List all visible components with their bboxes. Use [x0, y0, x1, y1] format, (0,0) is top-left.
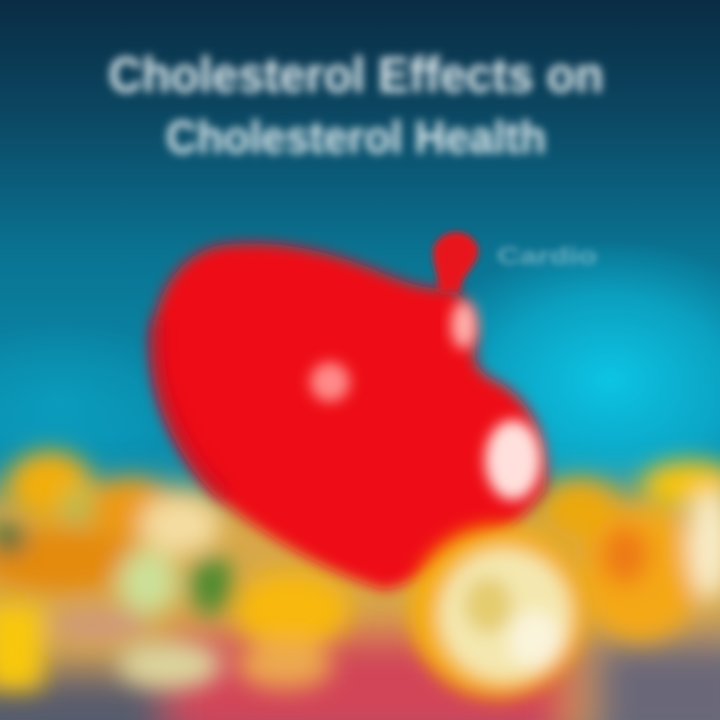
heart shape [152, 232, 546, 590]
table surface [0, 490, 720, 720]
title: Cholesterol Effects on [108, 47, 604, 103]
background glow [0, 240, 720, 520]
small caption: Cardio [497, 243, 597, 270]
title [108, 47, 604, 163]
heart body [152, 243, 546, 590]
vessel stem [433, 232, 478, 292]
shade: left edge [157, 320, 225, 495]
highlight: lower right [485, 420, 541, 500]
highlight: upper right [451, 301, 477, 349]
highlight: centre [310, 362, 350, 402]
food: right cluster [542, 461, 720, 641]
lemon slice [410, 526, 586, 698]
title: Cholesterol Health [166, 111, 546, 163]
food: left cluster [0, 451, 350, 690]
